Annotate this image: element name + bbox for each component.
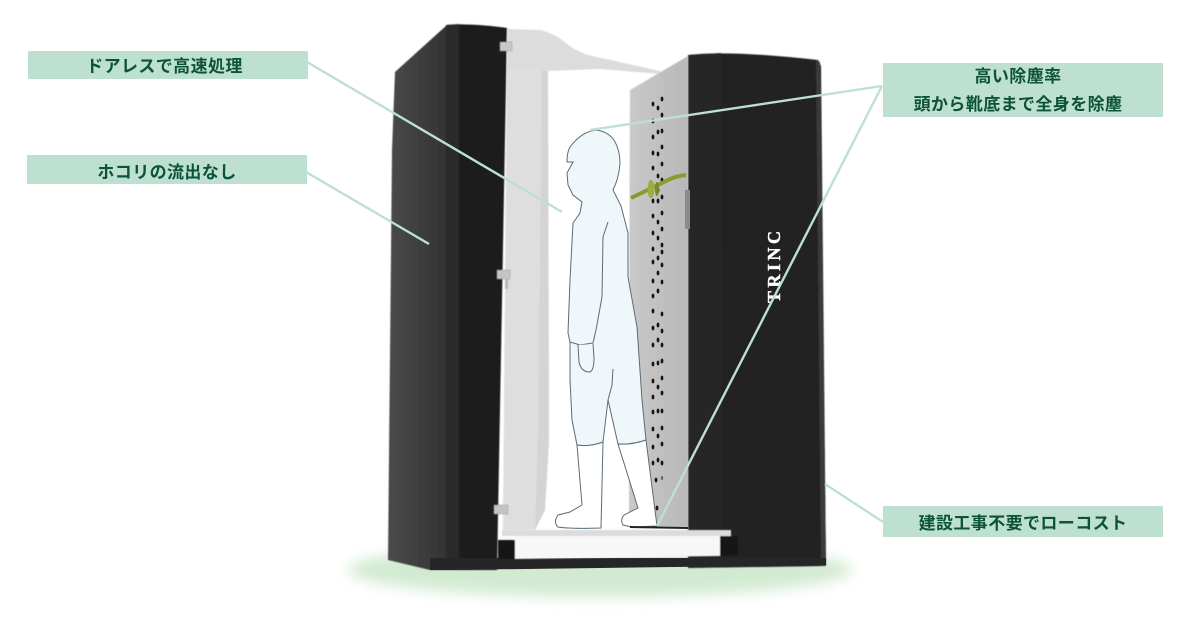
platform <box>498 530 738 559</box>
door curtain <box>503 29 661 530</box>
right tower side face <box>688 53 722 568</box>
label: no dust outflow <box>27 155 307 184</box>
label: high removal rate: 頭から靴底まで全身を除塵 <box>914 95 1122 114</box>
label: doorless: ドアレスで高速処理 <box>86 57 243 76</box>
label: no dust outflow: ホコリの流出なし <box>97 163 237 182</box>
hinge middle <box>497 270 510 279</box>
floor shadow <box>348 543 852 597</box>
callout line: low cost <box>825 484 883 522</box>
hinge bottom <box>494 505 508 514</box>
arm line <box>570 222 608 345</box>
callout line: high removal floor <box>657 86 882 526</box>
green nozzle <box>631 175 686 198</box>
callout line: no dust outflow <box>306 172 429 244</box>
label: high removal rate <box>883 63 1163 117</box>
glove <box>578 344 594 372</box>
left tower inner pillar <box>446 24 507 570</box>
perforated side panel <box>629 56 690 527</box>
left tower <box>388 24 507 570</box>
right tower <box>688 53 826 568</box>
label: low cost <box>883 506 1163 537</box>
right tower body <box>688 53 826 568</box>
person in cleanroom suit <box>556 130 688 528</box>
left tower outer face <box>388 25 447 570</box>
callout line: doorless <box>307 62 562 212</box>
suit upper body <box>567 130 646 446</box>
base strip <box>430 558 826 570</box>
rear curtain panel <box>494 29 661 530</box>
label: doorless <box>28 51 308 79</box>
logo text: TRINC <box>764 231 784 303</box>
side handle <box>685 190 690 229</box>
label: high removal rate: 高い除塵率 <box>974 67 1062 86</box>
hinge top <box>500 42 512 51</box>
callout lines <box>306 62 883 526</box>
vent holes <box>652 97 663 510</box>
boots <box>556 442 603 528</box>
callout line: high removal head <box>590 86 882 130</box>
label: low cost: 建設工事不要でローコスト <box>919 514 1127 533</box>
